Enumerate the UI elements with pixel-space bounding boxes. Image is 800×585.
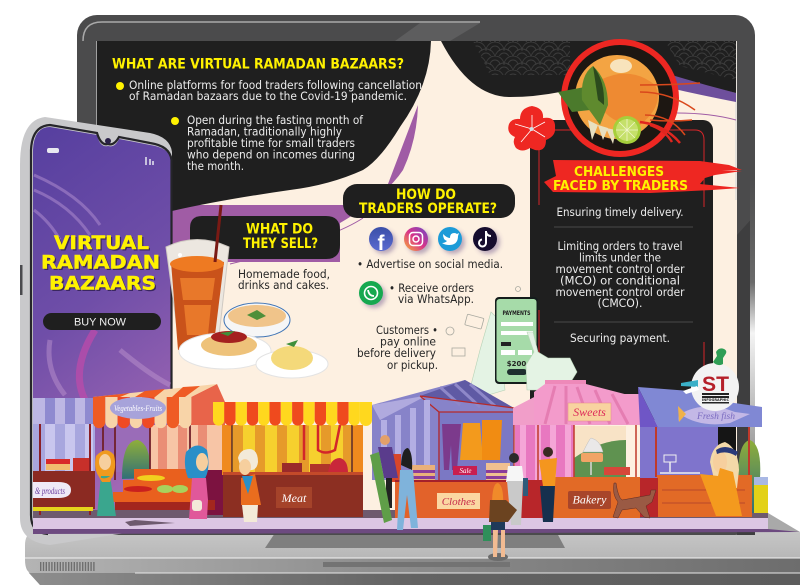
icon: hands holding phone payments: $200	[507, 360, 526, 368]
cat	[613, 483, 656, 518]
icon: hands holding phone payments: PAYMENTS	[502, 310, 530, 317]
laptop screen	[97, 41, 737, 531]
phone title	[42, 234, 162, 296]
smartphone: BAZAARS	[49, 272, 156, 294]
text: advertise on social media: • Advertise on social media.	[357, 257, 503, 271]
market stall: fresh fish	[638, 387, 768, 517]
person: woman in pink	[185, 445, 208, 519]
purple swoosh right	[660, 72, 736, 102]
heading: what are virtual ramadan bazaars: WHAT ARE VIRTUAL RAMADAN BAZAARS?	[112, 56, 404, 72]
text block: definition bullets: Open during the fasting month of	[187, 113, 364, 127]
panel: what do they sell: Homemade food,	[238, 267, 330, 281]
panel: what do they sell	[190, 216, 340, 292]
panel: what do they sell: THEY SELL?	[243, 236, 318, 252]
icon: payment doodles	[446, 286, 520, 356]
icon: iced drink	[166, 205, 229, 354]
market stall: clothes: Sale	[459, 467, 472, 475]
buy now button: BUY NOW	[74, 316, 127, 328]
logo: straits times pin: INFOGRAPHIC	[702, 398, 729, 402]
panel: how do traders operate heading: TRADERS OPERATE?	[359, 201, 497, 217]
text block: definition bullets: who depend on incomes during	[187, 148, 355, 162]
text: customers pay online	[357, 323, 438, 372]
panel: how do traders operate heading: HOW DO	[396, 187, 456, 203]
laptop lid bezel	[77, 15, 755, 535]
text: receive orders via whatsapp: via WhatsApp.	[398, 292, 474, 306]
text: customers pay online: pay online	[380, 334, 436, 348]
icon: soup bowl with prawn	[558, 39, 700, 157]
challenge: travel limits: Limiting orders to travel	[558, 239, 682, 253]
wave pattern	[473, 41, 736, 80]
speaker vent	[40, 562, 96, 571]
clothes sign: Clothes	[442, 496, 475, 508]
text block: definition bullets: of Ramadan bazaars due to the Covid-19 pandemic.	[129, 89, 407, 103]
sweets sign: Sweets	[573, 405, 606, 419]
text block: definition bullets	[116, 78, 422, 173]
phone screen	[33, 127, 171, 532]
market stall: vegetables and fruits	[93, 384, 225, 515]
panel: challenges faced by traders	[530, 120, 713, 420]
challenge: travel limits: movement control order	[556, 285, 685, 299]
person: man in orange shirt	[539, 447, 557, 522]
panel: what do they sell: drinks and cakes.	[238, 278, 329, 292]
person: foreground woman in brown	[483, 483, 517, 561]
challenge: travel limits: (CMCO).	[598, 296, 642, 310]
icon: tiktok	[473, 227, 497, 251]
text block: definition bullets: Online platforms for food traders following cancellation	[129, 78, 422, 92]
meat sign: Meat	[281, 491, 307, 505]
text: customers pay online: or pickup.	[387, 358, 438, 372]
logo: straits times pin: ST	[702, 373, 729, 396]
icon: facebook	[369, 227, 393, 255]
panel: what do they sell: WHAT DO	[246, 222, 313, 238]
panel: how do traders operate heading	[343, 184, 515, 218]
icon: instagram	[404, 227, 428, 251]
challenge: securing payment: Securing payment.	[570, 331, 670, 345]
icon: facebook: f	[378, 232, 386, 255]
text: receive orders via whatsapp	[389, 281, 474, 306]
smartphone	[20, 117, 172, 545]
challenge: travel limits: (MCO) or conditional	[560, 274, 680, 288]
base slot	[323, 562, 510, 567]
products sign: & products	[35, 486, 65, 496]
clothes sign	[437, 493, 480, 509]
person: woman in orange robe	[700, 442, 742, 516]
person: man with carpet	[370, 435, 398, 523]
meat sign	[276, 487, 312, 508]
phone title: BAZAARS	[50, 274, 158, 296]
banner: challenges faced by traders	[544, 160, 742, 194]
challenge: timely delivery: Ensuring timely delivery.	[556, 205, 684, 219]
banner: challenges faced by traders: FACED BY TRADERS	[553, 178, 688, 194]
phone title: VIRTUAL	[56, 234, 150, 256]
black top-right blob	[441, 41, 736, 97]
banner: challenges faced by traders: CHALLENGES	[574, 164, 664, 180]
person: woman in blue	[397, 448, 418, 530]
text block: definition bullets: the month.	[187, 159, 244, 173]
icon: food plates	[179, 303, 328, 378]
smartphone: RAMADAN	[41, 252, 160, 274]
street	[33, 510, 800, 534]
icon: whatsapp	[359, 281, 383, 305]
text block: definition bullets: profitable time for small traders	[187, 136, 355, 150]
text block: definition bullets: Ramadan, traditionally highly	[187, 124, 342, 138]
icon: hands holding phone payments	[471, 297, 577, 398]
icon: red flower	[508, 106, 555, 150]
laptop base	[25, 513, 800, 585]
market stall: meat	[213, 402, 372, 517]
text: customers pay online: before delivery	[357, 346, 436, 360]
touchpad	[265, 533, 565, 548]
challenge: travel limits: limits under the	[579, 250, 661, 264]
text: customers pay online: Customers •	[376, 323, 438, 337]
logo: straits times pin	[681, 348, 739, 411]
fresh fish sign: Fresh fish	[696, 411, 735, 422]
challenge: travel limits	[556, 239, 685, 310]
text: receive orders via whatsapp: • Receive orders	[389, 281, 474, 295]
purple swoosh	[165, 105, 418, 262]
buy now button	[43, 313, 161, 330]
challenge: travel limits: movement control order	[556, 262, 685, 276]
market stall: sweets and bakery	[513, 380, 640, 518]
vegetables sign: Vegetables-Fruits	[114, 404, 162, 413]
green pin	[713, 348, 726, 365]
bakery sign: Bakery	[573, 492, 607, 506]
phone title: RAMADAN	[42, 253, 162, 275]
market stall: clothes	[372, 380, 514, 518]
black top-left blob	[97, 41, 431, 225]
person: woman in white top	[506, 453, 528, 525]
icon: twitter	[438, 227, 462, 251]
person: woman in teal	[95, 450, 116, 516]
market stall: lavender products	[33, 398, 95, 515]
person: man in orange	[238, 449, 261, 522]
smartphone: VIRTUAL	[54, 232, 149, 254]
